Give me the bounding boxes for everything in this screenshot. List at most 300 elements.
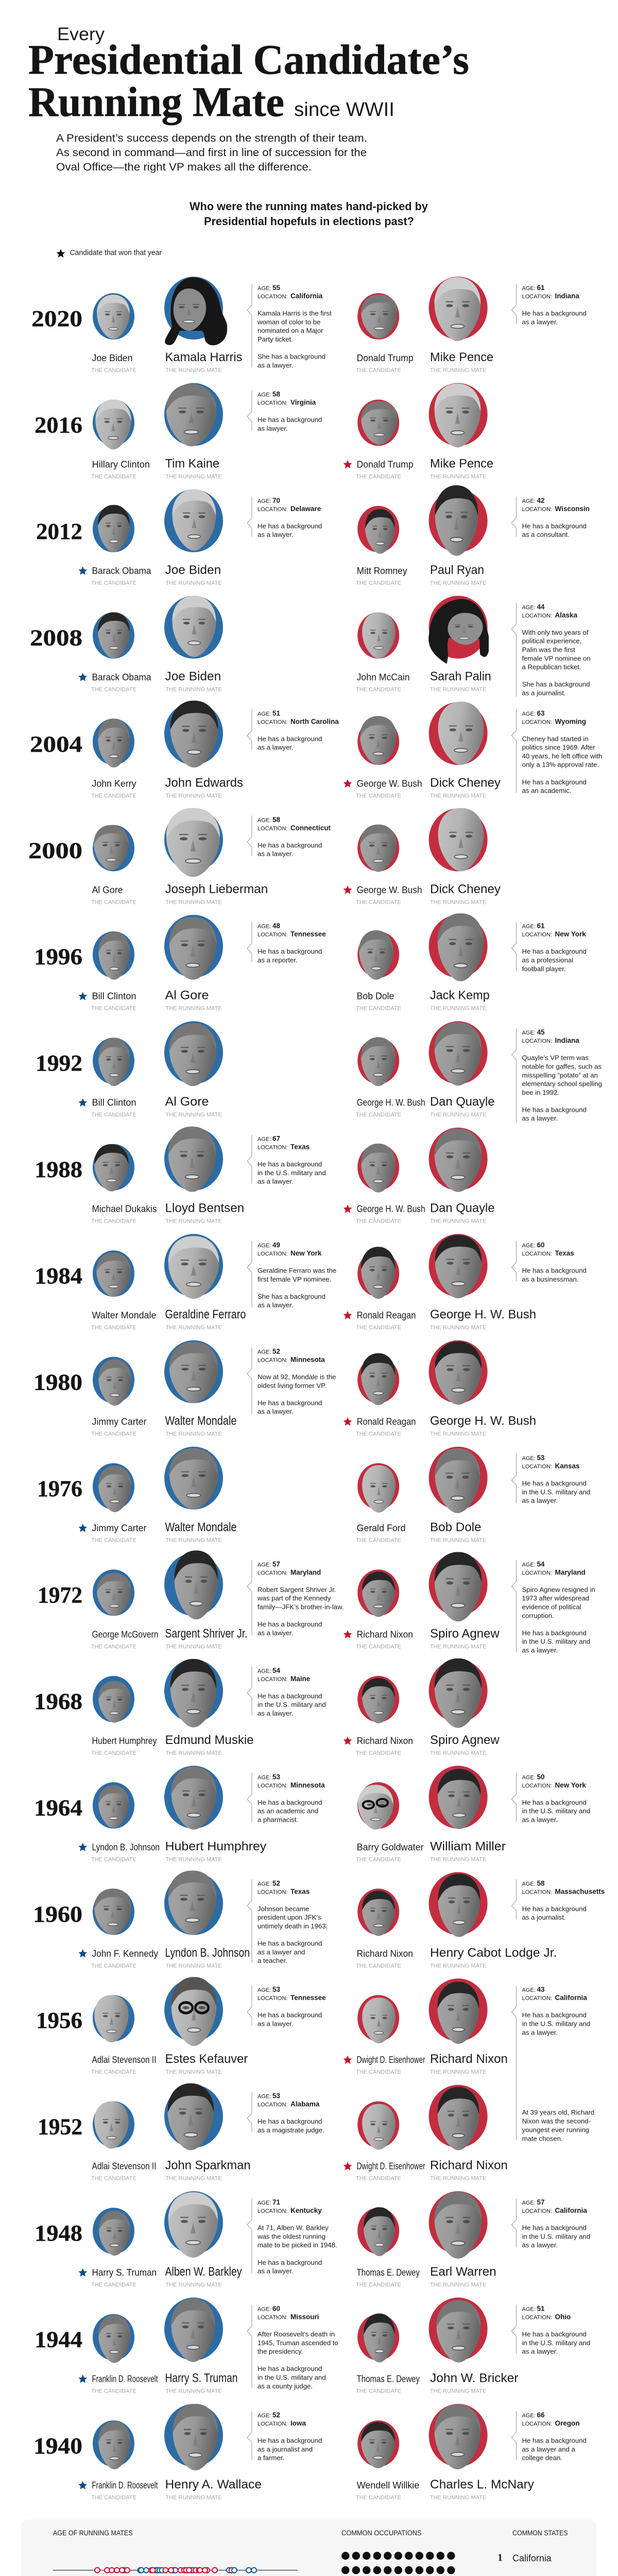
winner star: Dwight D. Eisenhower xyxy=(343,2056,352,2064)
info: George H. W. Bush: Texas xyxy=(555,1249,574,1257)
row: 1976 xyxy=(37,1447,590,1544)
running mate: George H. W. Bush xyxy=(429,1234,536,1331)
info: Lyndon B. Johnson: president upon JFK’s xyxy=(258,1913,321,1921)
info: Sargent Shriver Jr.: He has a background xyxy=(258,1620,322,1628)
info: Charles L. McNary: LOCATION: xyxy=(522,2421,552,2427)
info: Dick Cheney: Wyoming xyxy=(555,718,586,725)
info: Henry Cabot Lodge Jr.: LOCATION: xyxy=(522,1889,552,1895)
running mate: Sargent Shriver Jr.: Sargent Shriver Jr. xyxy=(165,1626,247,1640)
candidate: Mitt Romney: Mitt Romney xyxy=(357,566,407,576)
info: Dan Quayle: Indiana xyxy=(555,1037,579,1044)
info: John Sparkman: Alabama xyxy=(290,2100,320,2108)
running mate: Geraldine Ferraro: Geraldine Ferraro xyxy=(165,1308,246,1321)
info: Lyndon B. Johnson: Johnson became xyxy=(258,1905,309,1912)
candidate: George H. W. Bush: George H. W. Bush xyxy=(357,1204,425,1214)
running mate: Henry Cabot Lodge Jr.: Henry Cabot Lodge Jr. xyxy=(430,1946,557,1960)
title block xyxy=(28,24,469,125)
running mate: Henry Cabot Lodge Jr. xyxy=(429,1872,557,1969)
info: Joseph Lieberman: as a lawyer. xyxy=(258,850,294,858)
info: Lloyd Bentsen: 67 xyxy=(272,1135,280,1143)
info: Sarah Palin: With only two years of xyxy=(522,629,589,636)
running mate: Sargent Shriver Jr. xyxy=(164,1550,247,1650)
info: Henry A. Wallace: a farmer. xyxy=(258,2454,284,2462)
info: Lloyd Bentsen: Texas xyxy=(290,1143,310,1151)
info: Spiro Agnew: in the U.S. military and xyxy=(522,1638,590,1646)
info: Geraldine Ferraro: LOCATION: xyxy=(258,1251,287,1257)
info: Charles L. McNary: AGE: xyxy=(522,2413,536,2419)
running mate: Al Gore: THE RUNNING MATE xyxy=(166,1112,222,1118)
candidate: Thomas E. Dewey: THE CANDIDATE xyxy=(356,2388,401,2395)
info: Dick Cheney: 63 xyxy=(537,709,545,717)
info: William Miller: LOCATION: xyxy=(522,1783,552,1789)
running mate: Hubert Humphrey: THE RUNNING MATE xyxy=(166,1856,222,1862)
running mate: John W. Bricker xyxy=(429,2298,518,2395)
info: John Edwards: AGE: xyxy=(258,711,271,717)
info: Sarah Palin: as a journalist. xyxy=(522,689,566,697)
running mate: Harry S. Truman: THE RUNNING MATE xyxy=(166,2388,222,2395)
info: Charles L. McNary: Oregon xyxy=(555,2419,580,2427)
running mate: Mike Pence xyxy=(429,383,493,480)
list: common states: California xyxy=(512,2553,552,2564)
running mate: Bob Dole: Bob Dole xyxy=(430,1520,481,1534)
candidate: Barack Obama xyxy=(91,612,151,692)
info: Lyndon B. Johnson: untimely death in 1963. xyxy=(258,1922,328,1930)
candidate: Donald Trump: Donald Trump xyxy=(357,353,414,363)
running mate: Charles L. McNary: Charles L. McNary xyxy=(430,2478,534,2492)
info: Tim Kaine: Virginia xyxy=(290,398,316,406)
year: 1984 xyxy=(35,1263,82,1289)
running mate: Jack Kemp: Jack Kemp xyxy=(430,989,490,1003)
info: William Miller xyxy=(512,1773,590,1823)
info: Alben W. Barkley: mate to be picked in 1948. xyxy=(258,2241,337,2249)
chart: age strip plot xyxy=(49,2568,302,2576)
info: Al Gore: LOCATION: xyxy=(258,932,287,938)
candidate: Bill Clinton: Bill Clinton xyxy=(92,1097,136,1108)
running mate: John Edwards: John Edwards xyxy=(165,776,243,790)
year: 1988 xyxy=(35,1157,82,1182)
candidate: Harry S. Truman: THE CANDIDATE xyxy=(91,2282,136,2288)
list: common states: 1 xyxy=(497,2552,503,2564)
info: Henry Cabot Lodge Jr.: as a journalist. xyxy=(522,1913,566,1921)
candidate: Lyndon B. Johnson: Lyndon B. Johnson xyxy=(92,1842,160,1852)
running mate: George H. W. Bush: George H. W. Bush xyxy=(430,1308,536,1321)
candidate: Franklin D. Roosevelt: Franklin D. Roosevelt xyxy=(92,2480,158,2490)
candidate: George H. W. Bush: George H. W. Bush xyxy=(357,1097,425,1108)
candidate: Adlai Stevenson II xyxy=(91,2102,157,2182)
info: Dan Quayle: He has a background xyxy=(522,1106,587,1113)
info: Sargent Shriver Jr.: LOCATION: xyxy=(258,1570,287,1576)
info: Geraldine Ferraro: Geraldine Ferraro was the xyxy=(258,1267,336,1275)
info: George H. W. Bush xyxy=(512,1241,587,1283)
candidate: Michael Dukakis: THE CANDIDATE xyxy=(91,1218,136,1225)
info: Harry S. Truman: 60 xyxy=(272,2305,280,2313)
info: Earl Warren: LOCATION: xyxy=(522,2208,552,2214)
candidate: Lyndon B. Johnson xyxy=(91,1782,160,1862)
running mate: William Miller: William Miller xyxy=(430,1839,506,1853)
info: Alben W. Barkley: At 71, Alben W. Barkley xyxy=(258,2224,329,2232)
running mate: Henry A. Wallace: Henry A. Wallace xyxy=(165,2478,262,2492)
running mate: Dick Cheney: THE RUNNING MATE xyxy=(430,899,486,905)
running mate: Geraldine Ferraro: THE RUNNING MATE xyxy=(166,1325,222,1331)
year: 1944 xyxy=(35,2327,82,2352)
info: Harry S. Truman xyxy=(247,2305,338,2390)
info: Paul Ryan xyxy=(512,497,590,538)
info: Dick Cheney: Cheney had started in xyxy=(522,735,589,742)
info: Spiro Agnew: LOCATION: xyxy=(522,1570,552,1576)
candidate: John Kerry: John Kerry xyxy=(92,778,136,789)
year: 1980 xyxy=(33,1369,82,1395)
info: Joseph Lieberman: 58 xyxy=(272,816,281,823)
info: Tim Kaine xyxy=(247,390,322,432)
info: Earl Warren: California xyxy=(555,2207,587,2214)
info: Bob Dole: Kansas xyxy=(555,1462,580,1470)
candidate: Adlai Stevenson II: THE CANDIDATE xyxy=(91,2069,136,2075)
info: Hubert Humphrey: LOCATION: xyxy=(258,1783,287,1789)
running mate: Mike Pence: Mike Pence xyxy=(430,456,493,470)
candidate: Adlai Stevenson II: Adlai Stevenson II xyxy=(92,2161,157,2172)
info: Alben W. Barkley: was the oldest running xyxy=(257,2232,325,2240)
running mate: John Edwards xyxy=(164,701,243,799)
info: George H. W. Bush: as a businessman. xyxy=(522,1275,578,1283)
running mate: Paul Ryan: Paul Ryan xyxy=(430,563,484,577)
info: John W. Bricker: He has a background xyxy=(522,2330,587,2338)
info: Paul Ryan: 42 xyxy=(537,497,545,504)
running mate: Sarah Palin: THE RUNNING MATE xyxy=(430,686,486,692)
info: Edmund Muskie: AGE: xyxy=(258,1668,271,1674)
info: Lloyd Bentsen: AGE: xyxy=(258,1137,271,1143)
info: Dick Cheney: LOCATION: xyxy=(522,719,552,725)
running mate: Joe Biden: Joe Biden xyxy=(165,563,221,577)
info: Mike Pence: AGE: xyxy=(522,285,536,292)
info: Mike Pence: Indiana xyxy=(555,292,579,300)
year: 1964 xyxy=(34,1795,82,1820)
year: 2000 xyxy=(28,838,82,863)
info: Estes Kefauver: LOCATION: xyxy=(258,1995,287,2002)
running mate: Sarah Palin xyxy=(428,596,491,692)
info: Dan Quayle: as a lawyer. xyxy=(522,1114,558,1122)
info: Sarah Palin: Palin was the first xyxy=(522,646,575,653)
running mate: Mike Pence xyxy=(429,277,493,374)
candidate: Richard Nixon: Richard Nixon xyxy=(357,1736,413,1746)
running mate: Richard Nixon: Richard Nixon xyxy=(430,2159,508,2173)
candidate: George W. Bush: George W. Bush xyxy=(357,778,422,789)
info: Jack Kemp xyxy=(512,922,587,973)
panel: summary xyxy=(21,2519,596,2576)
running mate: Lyndon B. Johnson: Lyndon B. Johnson xyxy=(165,1946,250,1960)
candidate: George McGovern xyxy=(91,1569,159,1650)
dot chart: occupations xyxy=(341,2552,455,2576)
info: Lyndon B. Johnson: He has a background xyxy=(258,1939,322,1947)
candidate: Ronald Reagan: Ronald Reagan xyxy=(357,1417,416,1427)
info: Dan Quayle: Quayle’s VP term was xyxy=(522,1054,589,1062)
running mate: Earl Warren: THE RUNNING MATE xyxy=(430,2282,486,2288)
info: Edmund Muskie: He has a background xyxy=(258,1692,322,1700)
year: 1956 xyxy=(36,2008,82,2033)
candidate: Jimmy Carter: THE CANDIDATE xyxy=(91,1431,136,1437)
info: John Edwards: LOCATION: xyxy=(258,719,287,725)
candidate: Donald Trump: Donald Trump xyxy=(357,459,414,469)
candidate: Bill Clinton xyxy=(91,1038,136,1118)
year: 1968 xyxy=(34,1689,82,1714)
year: 2004 xyxy=(30,732,82,757)
candidate: Barack Obama: Barack Obama xyxy=(92,566,151,576)
info: Spiro Agnew: evidence of political xyxy=(522,1603,581,1611)
candidate: Franklin D. Roosevelt: Franklin D. Roosevelt xyxy=(92,2374,158,2384)
candidate: Joe Biden xyxy=(91,293,136,374)
info: John Sparkman: 53 xyxy=(272,2092,281,2100)
info: Spiro Agnew xyxy=(512,1560,595,1654)
running mate: Earl Warren xyxy=(429,2191,496,2288)
candidate: Al Gore xyxy=(91,825,136,905)
info: Kamala Harris: She has a background xyxy=(258,352,325,361)
running mate: Dan Quayle: THE RUNNING MATE xyxy=(430,1112,486,1118)
candidate: Bill Clinton: THE CANDIDATE xyxy=(91,1112,136,1118)
info: Earl Warren xyxy=(512,2198,590,2249)
info: Edmund Muskie xyxy=(247,1667,326,1717)
running mate: Geraldine Ferraro xyxy=(164,1234,246,1331)
running mate: Al Gore: THE RUNNING MATE xyxy=(166,1006,222,1012)
running mate: Joseph Lieberman xyxy=(164,808,268,905)
info: Dick Cheney: AGE: xyxy=(522,711,536,717)
info: Sargent Shriver Jr. xyxy=(247,1560,344,1637)
candidate: Wendell Willkie: THE CANDIDATE xyxy=(356,2495,401,2501)
running mate: Joe Biden: THE RUNNING MATE xyxy=(166,580,222,586)
running mate: Joe Biden xyxy=(164,596,223,692)
winner star: Ronald Reagan xyxy=(343,1417,352,1426)
info: Walter Mondale: Minnesota xyxy=(290,1356,325,1363)
info: Richard Nixon (line runs down into the 1952 row): in the U.S. military and xyxy=(522,2020,590,2027)
candidate: Walter Mondale: Walter Mondale xyxy=(92,1310,157,1320)
candidate: Barack Obama: Barack Obama xyxy=(92,672,151,682)
info: Joe Biden xyxy=(247,497,322,538)
running mate: Richard Nixon xyxy=(429,2085,508,2182)
running mate: Spiro Agnew: Spiro Agnew xyxy=(430,1733,500,1747)
info: Henry A. Wallace: Iowa xyxy=(290,2419,306,2427)
candidate: Barry Goldwater xyxy=(356,1782,424,1862)
title: Running Mate: Running Mate xyxy=(28,78,284,125)
info: Walter Mondale: Now at 92, Mondale is the xyxy=(258,1373,336,1381)
info: Dan Quayle: notable for gaffes, such as xyxy=(522,1062,602,1070)
candidate: Richard Nixon xyxy=(356,1569,413,1650)
row: 1972 xyxy=(38,1550,595,1654)
info: John Sparkman: He has a background xyxy=(258,2117,322,2125)
info: Walter Mondale: as a lawyer. xyxy=(258,1408,294,1415)
candidate: Ronald Reagan: THE CANDIDATE xyxy=(356,1325,401,1331)
info: Henry Cabot Lodge Jr. xyxy=(512,1879,605,1921)
info: Jack Kemp: New York xyxy=(555,930,586,938)
candidate: Ronald Reagan xyxy=(356,1353,416,1437)
info: Sargent Shriver Jr.: family—JFK’s brother-in-law. xyxy=(258,1603,344,1611)
running mate: Lyndon B. Johnson xyxy=(164,1871,250,1969)
info: Estes Kefauver: He has a background xyxy=(258,2011,322,2019)
running mate: Al Gore xyxy=(164,915,223,1012)
info: Joe Biden: He has a background xyxy=(258,522,322,530)
info: Joseph Lieberman: AGE: xyxy=(258,817,271,823)
info: Kamala Harris: 55 xyxy=(272,284,281,292)
info: Alben W. Barkley: as a lawyer. xyxy=(258,2267,294,2275)
running mate: Henry A. Wallace: THE RUNNING MATE xyxy=(166,2495,222,2501)
info: Geraldine Ferraro: first female VP nominee. xyxy=(258,1275,331,1283)
running mate: Joe Biden xyxy=(164,489,223,586)
info: Lyndon B. Johnson: Texas xyxy=(290,1888,310,1895)
info: Alben W. Barkley: LOCATION: xyxy=(258,2208,287,2214)
candidate: Hillary Clinton: THE CANDIDATE xyxy=(91,473,136,480)
info: Lyndon B. Johnson: 52 xyxy=(272,1879,280,1887)
year: 1996 xyxy=(34,944,82,970)
info: Henry A. Wallace: AGE: xyxy=(258,2413,271,2419)
candidate: John Kerry: THE CANDIDATE xyxy=(91,793,136,799)
running mate: George H. W. Bush: George H. W. Bush xyxy=(430,1414,536,1428)
info: Tim Kaine: LOCATION: xyxy=(258,400,287,406)
candidate: Al Gore: Al Gore xyxy=(92,885,123,895)
info: Walter Mondale: 52 xyxy=(272,1348,280,1355)
info: Richard Nixon (line runs down into the 1952 row) xyxy=(512,1986,590,2140)
candidate: Ronald Reagan xyxy=(356,1247,416,1331)
info: John W. Bricker: in the U.S. military and xyxy=(522,2339,590,2347)
info: Tim Kaine: AGE: xyxy=(258,392,271,398)
info: Al Gore: AGE: xyxy=(258,924,271,930)
info: Jack Kemp: AGE: xyxy=(522,924,536,930)
info: Kamala Harris: LOCATION: xyxy=(258,294,287,300)
info: Geraldine Ferraro: as a lawyer. xyxy=(258,1301,294,1309)
intro text: Oval Office—the right VP makes all the difference. xyxy=(56,161,312,173)
running mate: Joe Biden: THE RUNNING MATE xyxy=(166,686,222,692)
row: 2016 xyxy=(35,383,493,480)
info: Harry S. Truman: 1945, Truman ascended to xyxy=(258,2339,338,2347)
candidate: Dwight D. Eisenhower xyxy=(356,2102,425,2182)
sub-heading question: Who were the running mates hand-picked by xyxy=(190,200,428,213)
candidate: Hillary Clinton xyxy=(91,399,150,480)
candidate: Dwight D. Eisenhower: THE CANDIDATE xyxy=(356,2069,401,2075)
candidate: Mitt Romney xyxy=(356,506,407,586)
info: Alben W. Barkley: Kentucky xyxy=(290,2207,322,2214)
year: 1960 xyxy=(33,1902,82,1927)
info: Earl Warren: AGE: xyxy=(522,2200,536,2206)
running mate: Joe Biden: Joe Biden xyxy=(165,669,221,683)
running mate: Dan Quayle: THE RUNNING MATE xyxy=(430,1218,486,1225)
candidate: Walter Mondale xyxy=(91,1250,157,1331)
winner star: Barack Obama xyxy=(78,673,87,681)
info: Joseph Lieberman: Connecticut xyxy=(290,824,331,832)
running mate: Alben W. Barkley: Alben W. Barkley xyxy=(165,2265,242,2279)
candidate: Richard Nixon: Richard Nixon xyxy=(357,1948,413,1959)
candidate: Bill Clinton xyxy=(91,931,136,1012)
row: 1996 xyxy=(34,913,587,1012)
info: Henry A. Wallace: LOCATION: xyxy=(258,2421,287,2427)
info: Dan Quayle: elementary school spelling xyxy=(522,1080,602,1088)
info: Jack Kemp: football player. xyxy=(522,965,566,973)
info: Tim Kaine: 58 xyxy=(272,390,281,398)
info: Earl Warren: He has a background xyxy=(522,2224,587,2232)
running mate: Alben W. Barkley xyxy=(164,2191,242,2288)
running mate: George H. W. Bush xyxy=(429,1341,536,1437)
info: John W. Bricker: 51 xyxy=(537,2305,545,2313)
info: John Edwards xyxy=(247,709,339,751)
running mate: Jack Kemp: THE RUNNING MATE xyxy=(430,1006,486,1012)
info: Bob Dole: AGE: xyxy=(522,1455,536,1462)
candidate: Dwight D. Eisenhower xyxy=(356,1995,425,2075)
info: Henry A. Wallace: 52 xyxy=(272,2411,280,2419)
info: Mike Pence: as a lawyer. xyxy=(522,318,558,326)
candidate: Michael Dukakis: Michael Dukakis xyxy=(92,1204,157,1214)
running mate: William Miller xyxy=(429,1766,506,1862)
info: Al Gore xyxy=(247,922,326,964)
winner star: Richard Nixon xyxy=(343,1630,352,1638)
info: Sarah Palin: She has a background xyxy=(522,681,590,688)
running mate: Dick Cheney xyxy=(429,702,501,799)
info: Walter Mondale: AGE: xyxy=(258,1349,271,1355)
info: Charles L. McNary: 66 xyxy=(537,2411,545,2419)
running mate: Tim Kaine: THE RUNNING MATE xyxy=(166,473,222,480)
candidate: Jimmy Carter xyxy=(91,1463,147,1544)
candidate: George McGovern: THE CANDIDATE xyxy=(91,1643,136,1650)
info: Hubert Humphrey: as an academic and xyxy=(258,1807,318,1815)
candidate: Bob Dole: Bob Dole xyxy=(357,991,394,1002)
row: 2000 xyxy=(28,808,501,905)
running mate: Paul Ryan: THE RUNNING MATE xyxy=(430,580,486,586)
info: Spiro Agnew: corruption. xyxy=(522,1612,554,1619)
info: Joseph Lieberman: He has a background xyxy=(258,841,322,849)
running mate: John Sparkman xyxy=(164,2083,250,2182)
sub-heading question xyxy=(190,200,428,228)
info: Sarah Palin xyxy=(512,603,591,697)
candidate: Barack Obama: THE CANDIDATE xyxy=(91,686,136,692)
row: 1992 xyxy=(36,1021,602,1122)
candidate: John McCain: John McCain xyxy=(357,672,410,682)
running mate: Alben W. Barkley: THE RUNNING MATE xyxy=(166,2282,222,2288)
winner star: Franklin D. Roosevelt xyxy=(78,2481,87,2489)
candidate: Al Gore: THE CANDIDATE xyxy=(91,899,136,905)
info: William Miller: 50 xyxy=(537,1773,545,1781)
candidate: Ronald Reagan: THE CANDIDATE xyxy=(356,1431,401,1437)
info: Lloyd Bentsen: in the U.S. military and xyxy=(258,1169,326,1177)
info: Walter Mondale: LOCATION: xyxy=(258,1357,287,1363)
info: Dick Cheney: politics since 1969. After xyxy=(522,743,595,751)
intro text: A President’s success depends on the strength of their team. xyxy=(56,132,367,144)
running mate: Spiro Agnew xyxy=(429,1552,500,1650)
info: Alben W. Barkley: AGE: xyxy=(258,2200,271,2206)
info: Dick Cheney: only a 13% approval rate. xyxy=(522,761,599,769)
info: Joe Biden: LOCATION: xyxy=(258,506,287,513)
info: Earl Warren: 57 xyxy=(537,2198,545,2206)
candidate: John Kerry xyxy=(91,719,136,799)
info: John Sparkman: as a magistrate judge. xyxy=(258,2126,324,2134)
running mate: Al Gore: Al Gore xyxy=(165,989,209,1003)
running mate: Dick Cheney: Dick Cheney xyxy=(430,776,501,790)
running mate: Mike Pence: THE RUNNING MATE xyxy=(430,367,486,374)
info: Hubert Humphrey: Minnesota xyxy=(290,1781,325,1789)
running mate: Jack Kemp xyxy=(429,913,490,1012)
candidate: Thomas E. Dewey: Thomas E. Dewey xyxy=(357,2374,420,2384)
info: Dan Quayle xyxy=(512,1028,602,1122)
year: 1940 xyxy=(33,2433,82,2459)
winner star: George H. W. Bush xyxy=(343,1205,352,1213)
running mate: Dan Quayle xyxy=(429,1128,494,1225)
running mate: Walter Mondale: THE RUNNING MATE xyxy=(166,1537,222,1544)
info: Paul Ryan: as a consultant. xyxy=(522,531,570,538)
running mate: Estes Kefauver xyxy=(164,1977,248,2075)
legend: star: Candidate that won that year xyxy=(70,248,162,257)
candidate: Joe Biden: THE CANDIDATE xyxy=(91,367,136,374)
running mate: Mike Pence: Mike Pence xyxy=(430,350,493,364)
candidate: Mitt Romney: THE CANDIDATE xyxy=(356,580,401,586)
info: Bob Dole: as a lawyer. xyxy=(522,1497,558,1504)
winner star: Donald Trump xyxy=(343,460,352,468)
running mate: Joseph Lieberman: THE RUNNING MATE xyxy=(166,899,222,905)
info: Harry S. Truman: Missouri xyxy=(290,2313,319,2321)
info: Kamala Harris: Kamala Harris is the first xyxy=(258,309,332,317)
candidate: Gerald Ford: Gerald Ford xyxy=(357,1523,406,1533)
